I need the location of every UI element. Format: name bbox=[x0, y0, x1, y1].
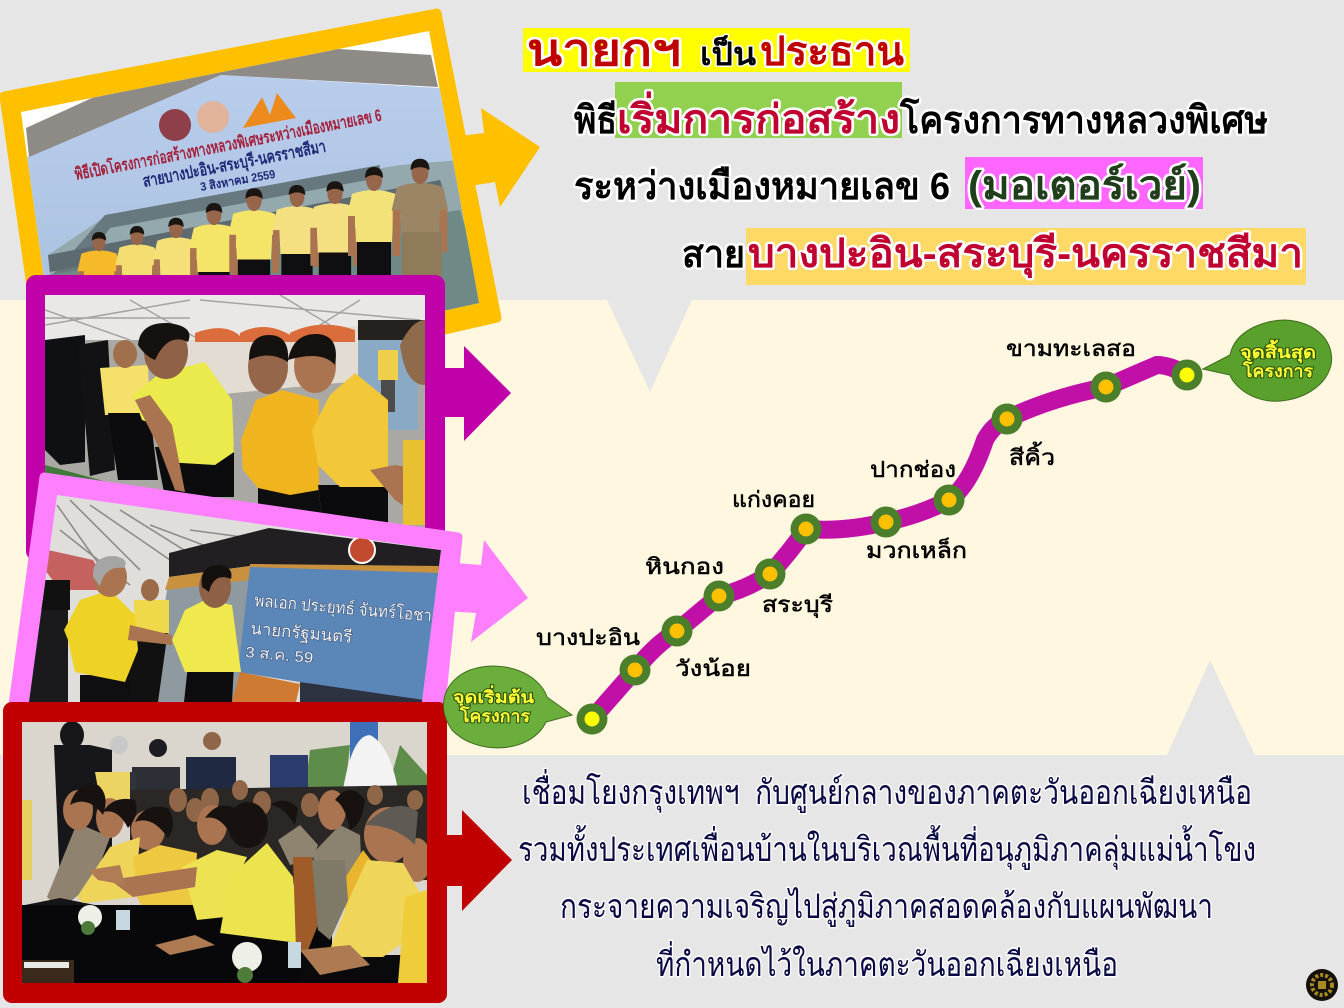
panel: pink photo frame bbox=[13, 477, 458, 705]
callout: start: โครงการ bbox=[459, 706, 531, 726]
route map bbox=[444, 320, 1332, 748]
photo caption bbox=[245, 596, 431, 664]
yellow shirts bbox=[77, 837, 140, 903]
heading line 2: เริ่มการก่อสร้าง bbox=[617, 91, 900, 142]
icon: ministry seal bbox=[1306, 969, 1338, 1001]
banner text: พิธีเปิดโครงการก่อสร้างทางหลวงพิเศษระหว่างเมืองหมายเลข 6 bbox=[73, 105, 383, 184]
heading line 4: สาย bbox=[682, 234, 745, 276]
photo: ceremony stage bbox=[21, 31, 479, 310]
callout: end: โครงการ bbox=[1242, 361, 1314, 381]
heading line 4: บางปะอิน-สระบุรี-นครราชสีมา bbox=[748, 232, 1303, 279]
callout: end: จุดสิ้นสุด bbox=[1240, 339, 1316, 363]
arrow: red bbox=[447, 810, 512, 911]
callout: start: จุดเริ่มต้น bbox=[453, 685, 534, 708]
station labels: วังน้อย bbox=[675, 656, 751, 681]
banner logos bbox=[159, 93, 296, 141]
station labels: ปากช่อง bbox=[870, 457, 956, 482]
station labels: สระบุรี bbox=[762, 592, 833, 618]
arrow: pink bbox=[445, 540, 528, 642]
photo caption: พลเอก ประยุทธ์ จันทร์โอชา bbox=[254, 590, 433, 626]
station labels: แก่งคอย bbox=[732, 487, 815, 512]
photo caption: นายกรัฐมนตรี bbox=[250, 619, 353, 648]
highlight: yellow bbox=[523, 28, 910, 72]
station labels: สีคิ้ว bbox=[1009, 442, 1055, 470]
heading line 3: (มอเตอร์เวย์) bbox=[968, 163, 1201, 208]
station labels: บางปะอิน bbox=[536, 625, 640, 650]
body text: กระจายความเจริญไปสู่ภูมิภาคสอดคล้องกับแผนพัฒนา bbox=[560, 887, 1213, 927]
body text bbox=[518, 769, 1256, 984]
banner text: สายบางปะอิน-สระบุรี-นครราชสีมา bbox=[141, 136, 328, 192]
highlight: gold bbox=[746, 228, 1306, 285]
heading line 1: เป็น bbox=[700, 34, 756, 72]
people on stage bbox=[77, 158, 448, 278]
body text: ที่กำหนดไว้ในภาคตะวันออกเฉียงเหนือ bbox=[656, 941, 1118, 984]
route line bbox=[592, 365, 1187, 719]
heading line 3 bbox=[574, 163, 1201, 208]
photo: inspecting the model bbox=[45, 295, 425, 545]
station labels bbox=[536, 336, 1136, 681]
back row faces bbox=[169, 780, 423, 822]
highlight: pink bbox=[965, 157, 1203, 209]
callout: start bbox=[444, 666, 572, 748]
arrow: purple bbox=[445, 346, 511, 441]
panel: red photo frame bbox=[7, 706, 443, 999]
arrow: yellow bbox=[460, 108, 540, 207]
cream route panel bbox=[0, 300, 1344, 755]
main faces bbox=[63, 790, 431, 882]
panel: yellow photo frame bbox=[0, 8, 502, 334]
photo: exhibition booth bbox=[20, 490, 450, 705]
panel: purple photo frame bbox=[30, 279, 441, 557]
banner text bbox=[73, 105, 383, 194]
photo caption: 3 ส.ค. 59 bbox=[245, 644, 314, 667]
heading line 2: โครงการทางหลวงพิเศษ bbox=[899, 97, 1268, 142]
callout: end bbox=[1203, 320, 1332, 401]
station labels: มวกเหล็ก bbox=[866, 536, 967, 563]
heading line 2 bbox=[574, 91, 1268, 142]
heading line 1: นายกฯ bbox=[527, 26, 681, 75]
station labels: หินกอง bbox=[645, 554, 724, 579]
station labels: ขามทะเลสอ bbox=[1006, 336, 1136, 361]
heading line 1 bbox=[527, 26, 904, 75]
heading line 2: พิธี bbox=[574, 100, 617, 142]
title block bbox=[523, 26, 1306, 285]
banner text: 3 สิงหาคม 2559 bbox=[199, 167, 277, 194]
heading line 1: ประธาน bbox=[760, 30, 904, 74]
station markers bbox=[576, 360, 1202, 734]
heading line 3: ระหว่างเมืองหมายเลข 6 bbox=[574, 166, 950, 208]
highlight: green bbox=[615, 82, 902, 138]
photo: seated audience bbox=[22, 721, 431, 983]
